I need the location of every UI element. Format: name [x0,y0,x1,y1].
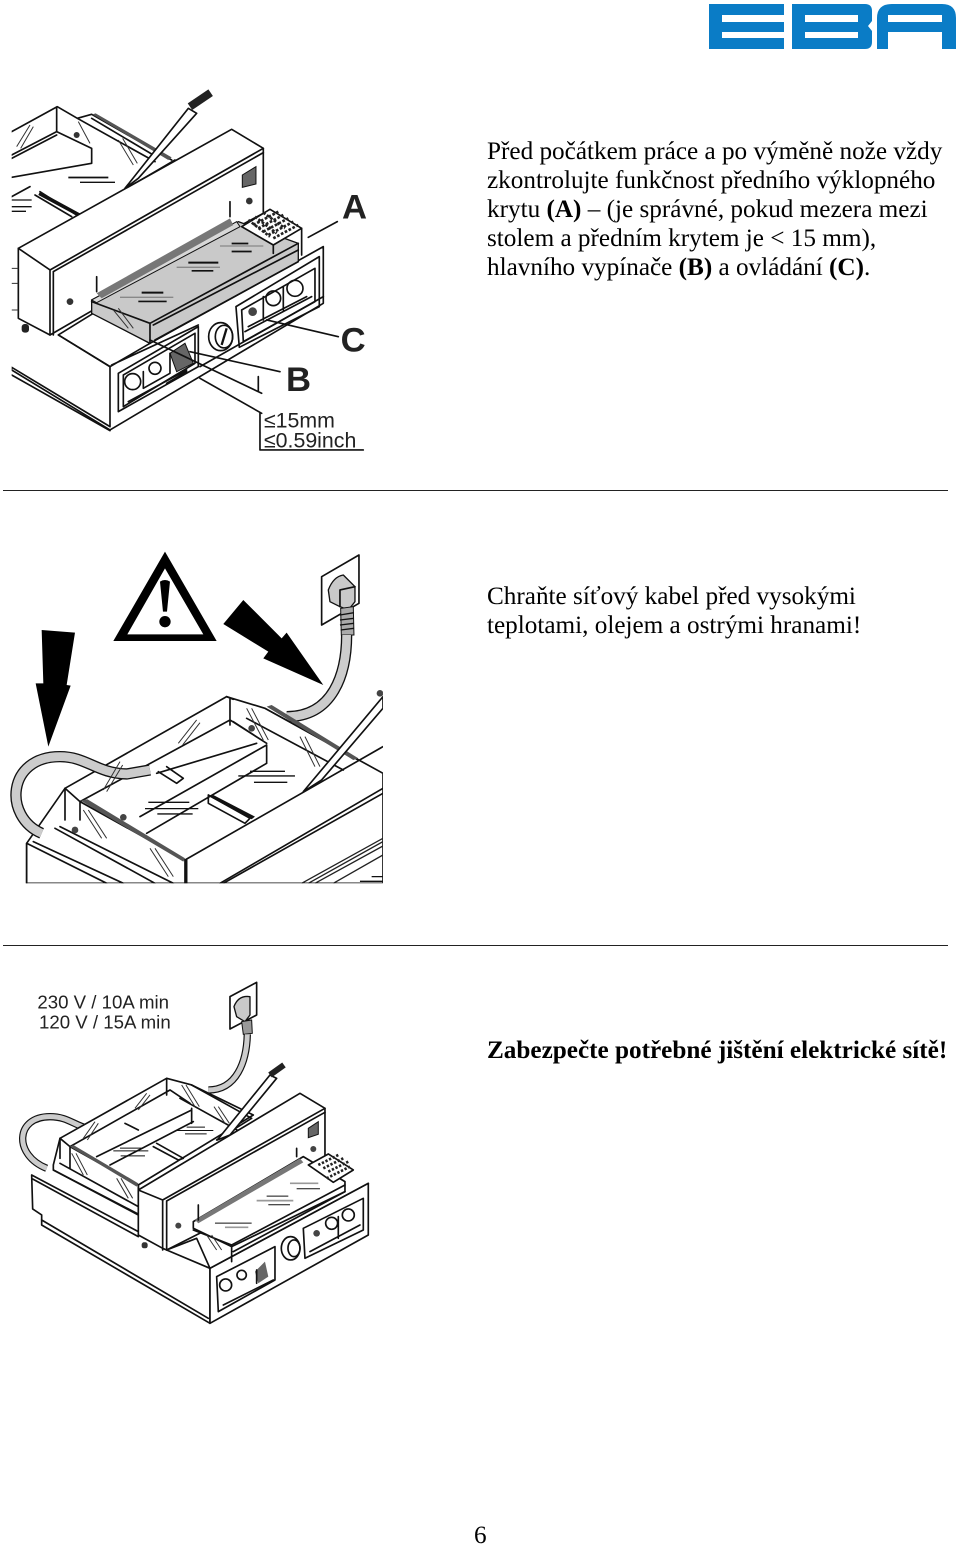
figure 2: cable hazards with warning [16,552,383,883]
label C: C [341,322,366,360]
logo: EBA [709,4,956,49]
table details [81,799,185,862]
handle [303,697,383,792]
voltage label: 120 V / 15A min [39,1011,171,1032]
wall socket and plug [322,555,359,635]
cable right [287,635,347,717]
back table [12,107,175,217]
dimension note: ≤15mm [264,408,335,432]
text block: cover check instructions: zkontrolujte funkčnost předního výklopného [487,167,935,194]
text block: cover check instructions: krytu (A) – (je správné, pokud mezera mezi [487,196,928,223]
beam [138,1093,325,1250]
lower base [32,1175,210,1323]
front panels [118,257,319,412]
base [12,247,323,430]
right hatching [302,838,383,883]
voltage label [37,991,171,1032]
label A: A [342,188,367,226]
cables [23,1034,247,1168]
text block: cover check instructions: stolem a předním krytem je < 15 mm), [487,225,876,252]
arrow: left [36,630,75,747]
arrow: right [223,600,323,685]
text block: electrical fuse: Zabezpečte potřebné jištění elektrické sítě! [487,1037,947,1064]
text block: cable protection [487,583,861,639]
dimension note: ≤0.59inch [264,429,356,453]
text block: cable protection: teplotami, olejem a ostrými hranami! [487,612,861,639]
gray cover [92,222,298,343]
warning triangle [113,552,217,641]
machine top [27,697,383,883]
figure 3: electrical requirements machine [23,982,368,1323]
text block: cover check instructions [487,138,942,281]
leader lines [150,222,338,413]
keypad [242,209,302,245]
voltage label: 230 V / 10A min [37,991,169,1012]
main switch [209,323,233,351]
cover with keypad [193,1157,345,1247]
rear table [53,1078,253,1215]
text block: cable protection: Chraňte síťový kabel před vysokými [487,583,856,610]
text block: cover check instructions: Před počátkem práce a po výměně nože vždy [487,138,942,165]
wall socket [230,982,257,1034]
front base [167,1183,368,1323]
figure 1: machine with front cover, labels A B C [12,93,367,453]
handle [217,1065,284,1140]
main beam [18,129,263,335]
text block: cover check instructions: hlavního vypínače (B) a ovládání (C). [487,254,870,281]
rear edge ticks [12,268,18,310]
label B: B [286,361,311,399]
dimension note [260,408,363,453]
handle [125,93,211,188]
cable left [16,757,150,833]
